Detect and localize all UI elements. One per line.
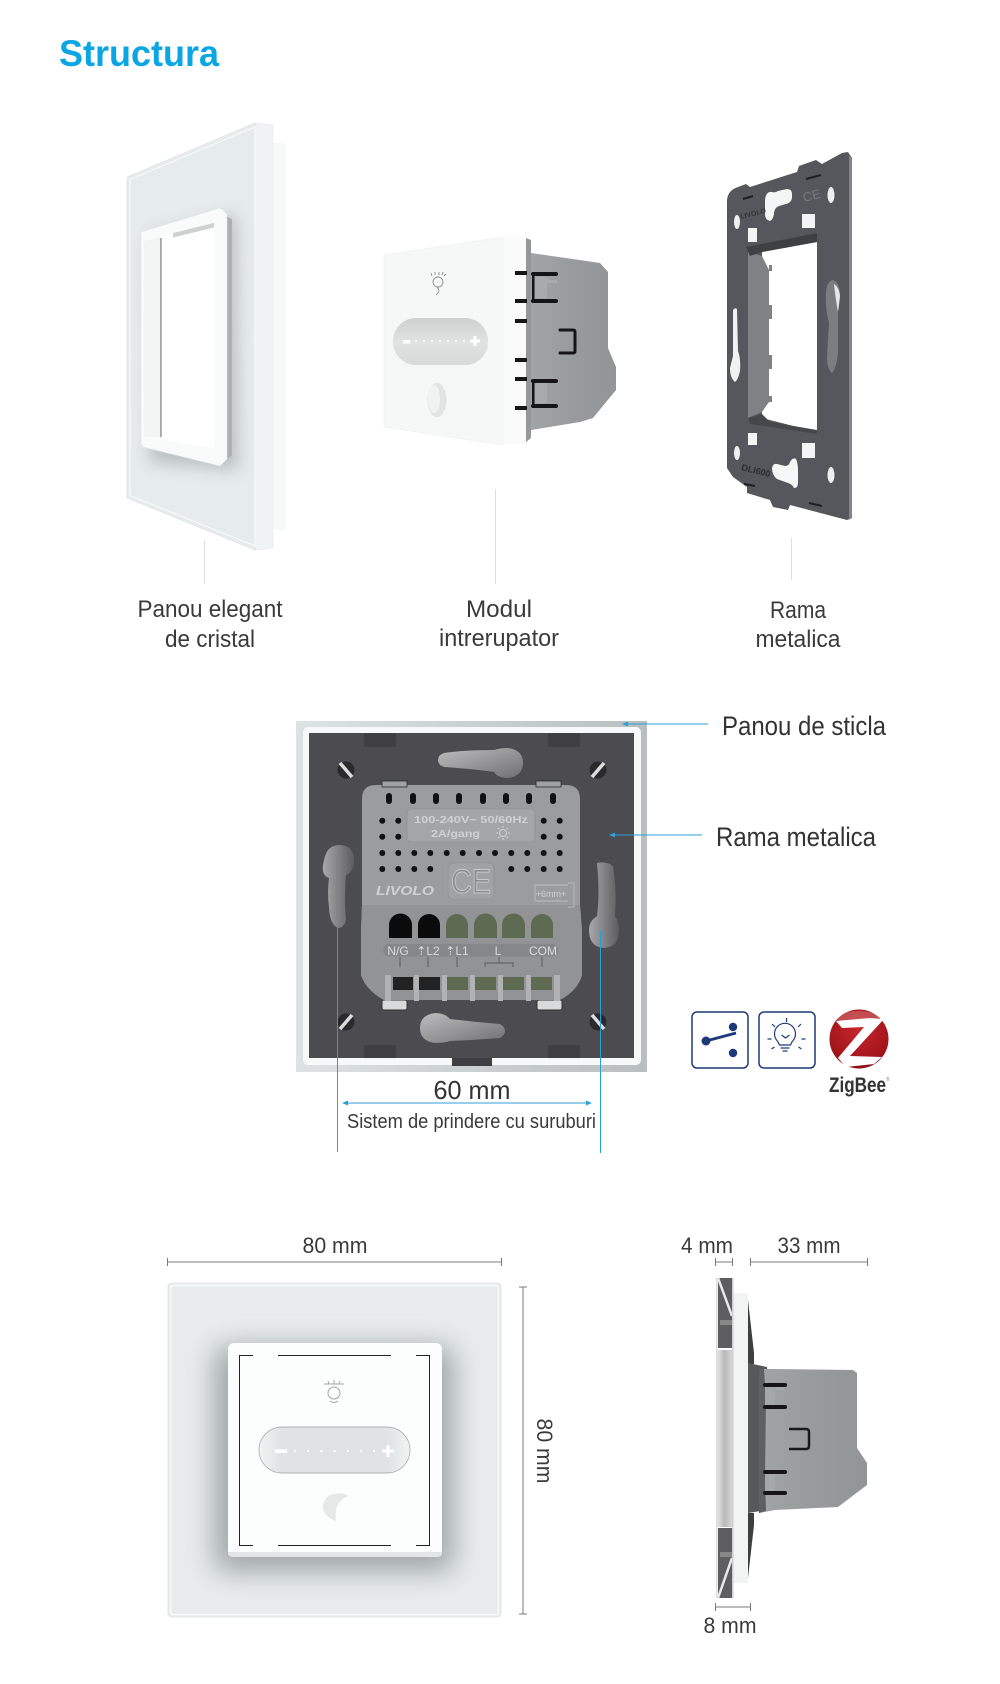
product: switch module	[384, 237, 616, 445]
right slot	[589, 862, 619, 948]
clip lighter blocks	[765, 1386, 785, 1492]
window top rim	[746, 233, 817, 256]
guide lines	[338, 855, 600, 1153]
product: side view	[716, 1278, 867, 1598]
arrowhead	[609, 832, 615, 838]
frame shadow	[148, 214, 238, 470]
window bottom rim	[748, 414, 817, 434]
module clips	[382, 1000, 562, 1010]
module side	[503, 237, 526, 445]
6mm gauge: +6mm+	[536, 889, 566, 899]
glass edge right	[732, 1278, 734, 1598]
shell lower band	[361, 905, 582, 1000]
dimension: 80 mm height	[519, 1287, 557, 1614]
lamp icon	[431, 272, 446, 295]
right slot highlight	[834, 284, 840, 312]
dark block	[748, 1363, 767, 1513]
white cutouts	[748, 214, 815, 458]
plate edge	[170, 1286, 498, 1614]
embossed CE: CE	[801, 186, 823, 205]
value: 60 mm	[434, 1075, 510, 1105]
white frame	[228, 1343, 442, 1557]
terminal labels: L	[495, 944, 502, 958]
rear plate top	[748, 1300, 754, 1364]
leader line: module	[494, 489, 496, 584]
glass edge	[716, 1278, 718, 1598]
U clip	[789, 1429, 809, 1449]
bottom slot	[420, 1013, 505, 1043]
icon: ZigBee logo	[829, 1010, 890, 1097]
top slot	[438, 748, 523, 778]
product: front view	[168, 1283, 501, 1617]
label: frame line 2: metalica	[756, 626, 841, 653]
minus	[275, 1450, 287, 1453]
icon: dimmable bulb	[759, 1012, 815, 1068]
terminal labels: COM	[529, 944, 557, 958]
round holes	[734, 187, 834, 483]
opening left wall	[144, 237, 161, 438]
terminal labels: ⇡L1	[445, 944, 469, 958]
6mm gauge	[535, 883, 574, 907]
sun icon	[496, 826, 510, 840]
level dots	[415, 340, 465, 342]
callout: glass panel	[622, 711, 887, 741]
label: panel: Panou elegant	[138, 596, 283, 623]
module grey strip	[526, 238, 531, 442]
glass back	[296, 721, 647, 1072]
CE mark: CE	[451, 863, 491, 901]
soft shadow	[214, 1346, 454, 1572]
bottom slot	[772, 458, 798, 488]
wall teeth	[769, 265, 772, 402]
glass border highlight	[130, 127, 255, 546]
inner frame	[141, 208, 227, 466]
black tabs	[763, 1383, 787, 1495]
rating text: 100-240V~ 50/60Hz	[414, 814, 528, 826]
leader line: panel	[204, 541, 206, 584]
line	[168, 1258, 502, 1266]
left slot	[730, 308, 740, 382]
left slot	[323, 845, 354, 928]
label: module: Modul	[466, 596, 532, 623]
title: Structura	[59, 33, 219, 74]
screws	[338, 762, 606, 1030]
dimension: 33 mm: 33 mm	[778, 1233, 840, 1258]
dimension: 80 mm width	[168, 1233, 502, 1266]
dark plate	[309, 733, 634, 1058]
opening top lip	[173, 223, 214, 238]
terminal labels: ⇡L2	[416, 944, 440, 958]
connector windows	[393, 977, 552, 990]
connector dividers	[385, 975, 560, 1001]
frame tabs	[743, 175, 822, 506]
plus	[470, 336, 480, 346]
window inner wall	[748, 252, 769, 418]
embossed code: DLI600	[741, 462, 772, 479]
plus	[382, 1445, 394, 1457]
minus	[403, 340, 410, 344]
caption: Sistem de prindere cu suruburi	[347, 1110, 596, 1133]
value: 80 mm	[302, 1233, 368, 1258]
product: metal frame	[727, 152, 852, 520]
plate tabs	[364, 733, 580, 1066]
dimension: 4 mm: 4 mm	[681, 1233, 733, 1258]
shell top tabs	[382, 781, 561, 787]
frame rail	[226, 216, 232, 459]
terminal caption band	[383, 944, 558, 956]
mounting dimple	[428, 383, 446, 417]
white plate	[733, 1293, 748, 1583]
callout: metal frame	[609, 822, 877, 852]
glass front	[127, 123, 255, 550]
U clip	[560, 330, 575, 353]
frame lower edge	[228, 1552, 442, 1557]
icon: ZigBee logo: ZigBee	[829, 1074, 886, 1097]
leader line: frame	[790, 538, 792, 580]
module shell	[361, 785, 582, 1000]
clip lighter blocks	[535, 277, 557, 403]
rating text 2: 2A/gang	[431, 828, 480, 840]
dimension: 33 mm	[750, 1233, 868, 1266]
vent dots	[379, 818, 563, 872]
grey body	[759, 1369, 867, 1513]
value: 80 mm	[532, 1418, 557, 1484]
rear plate bottom	[748, 1513, 754, 1578]
dimension: 8 mm: 8 mm	[704, 1613, 756, 1638]
body left shade	[759, 1369, 766, 1513]
dimension: 60 mm	[338, 855, 600, 1153]
terminal labels: N/G	[387, 944, 409, 958]
icon: ZigBee logo: ®	[886, 1076, 890, 1083]
brand: LIVOLO	[376, 883, 434, 898]
module front	[384, 237, 503, 445]
arrowheads	[342, 1100, 592, 1106]
frame plate	[727, 152, 852, 520]
glass plate	[168, 1283, 501, 1617]
label: module line 2: intrerupator	[439, 625, 559, 652]
terminal holes	[389, 914, 553, 938]
frame window	[762, 242, 817, 432]
black tabs	[515, 271, 558, 410]
product: glass panel	[127, 123, 286, 550]
arrowhead	[622, 722, 628, 726]
opening divider	[160, 238, 162, 437]
glass side edge	[255, 123, 273, 550]
line	[519, 1287, 527, 1614]
rating plate	[407, 809, 535, 842]
top slot	[765, 189, 792, 221]
white frame	[303, 727, 641, 1065]
glass bottom section	[718, 1528, 732, 1598]
embossed brand: LIVOLO	[740, 208, 767, 221]
glass top section	[718, 1278, 732, 1348]
dimple highlight	[428, 385, 440, 413]
text: Rama metalica	[716, 822, 877, 852]
arrow	[612, 834, 702, 836]
back plate	[272, 143, 286, 530]
dots	[294, 1450, 375, 1452]
product: back view	[296, 721, 647, 1072]
lamp icon	[324, 1380, 344, 1402]
right slot	[826, 280, 840, 373]
frame opening	[144, 223, 214, 448]
arrow	[626, 723, 708, 725]
dimension: 8 mm	[704, 1603, 756, 1638]
label: frame: Rama	[770, 597, 827, 624]
label: panel line 2: de cristal	[165, 626, 255, 653]
terminal ticks	[400, 957, 542, 967]
glass middle section	[717, 1350, 732, 1527]
module body	[531, 253, 616, 430]
frame edge	[849, 155, 852, 520]
inner module outline	[240, 1356, 430, 1546]
dimple	[323, 1493, 349, 1521]
top slots	[386, 793, 556, 804]
terminal labels	[387, 944, 557, 958]
touch pill	[393, 318, 488, 365]
text: Panou de sticla	[722, 711, 887, 741]
icon: switch	[692, 1012, 748, 1068]
pill	[259, 1427, 410, 1473]
